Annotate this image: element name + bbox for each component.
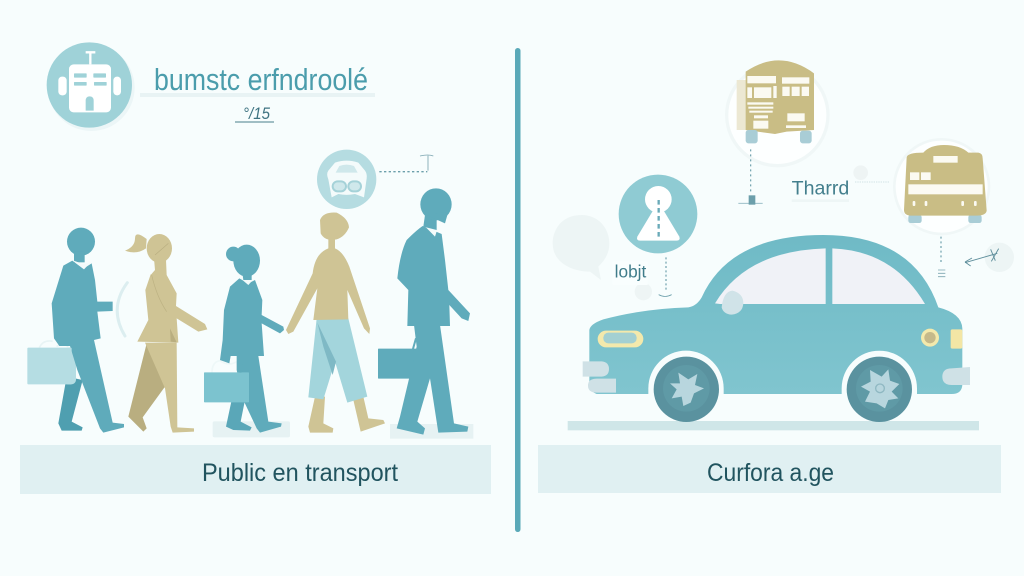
icon: small arrow with cross	[965, 243, 1014, 272]
person 4 with light trousers	[286, 213, 385, 433]
icon: double-decker bus	[727, 60, 828, 205]
panel: car (right)	[538, 60, 1014, 493]
person 5 with briefcase	[378, 188, 473, 439]
car illustration	[568, 235, 979, 430]
panel: public transport (left)	[20, 42, 491, 494]
tail light	[921, 329, 939, 347]
title: bumstc erfndroolé	[154, 62, 368, 97]
icon: speech bubble and label	[553, 215, 652, 300]
label: Tharrd: Tharrd	[792, 178, 849, 200]
bumpers	[583, 361, 609, 377]
divider	[515, 48, 520, 532]
headlight	[598, 331, 643, 347]
caption bar: public transport: Public en transport	[202, 459, 398, 487]
caption bar: car: Curfora a.ge	[707, 459, 834, 487]
icon: robot-like station badge	[47, 42, 135, 131]
person 3 with bag	[204, 245, 290, 437]
caption bar: public transport	[20, 445, 491, 494]
label: Tharrd	[792, 165, 889, 202]
rear wheel	[842, 351, 917, 422]
title	[140, 62, 375, 123]
caption bar: car	[538, 445, 1001, 493]
person 1 with bag	[27, 228, 127, 433]
icon: person pin badge	[619, 175, 697, 296]
road	[568, 421, 979, 430]
side mirror	[722, 291, 743, 315]
icon: front-view bus	[894, 139, 989, 277]
icon: car badge with dotted leader	[317, 150, 433, 209]
car body	[589, 235, 962, 394]
person 2 with ponytail	[125, 234, 207, 433]
car windows	[715, 248, 826, 304]
title: °/15	[243, 104, 270, 123]
front wheel	[648, 351, 724, 422]
icon: speech bubble and label: lobjt	[615, 262, 647, 282]
